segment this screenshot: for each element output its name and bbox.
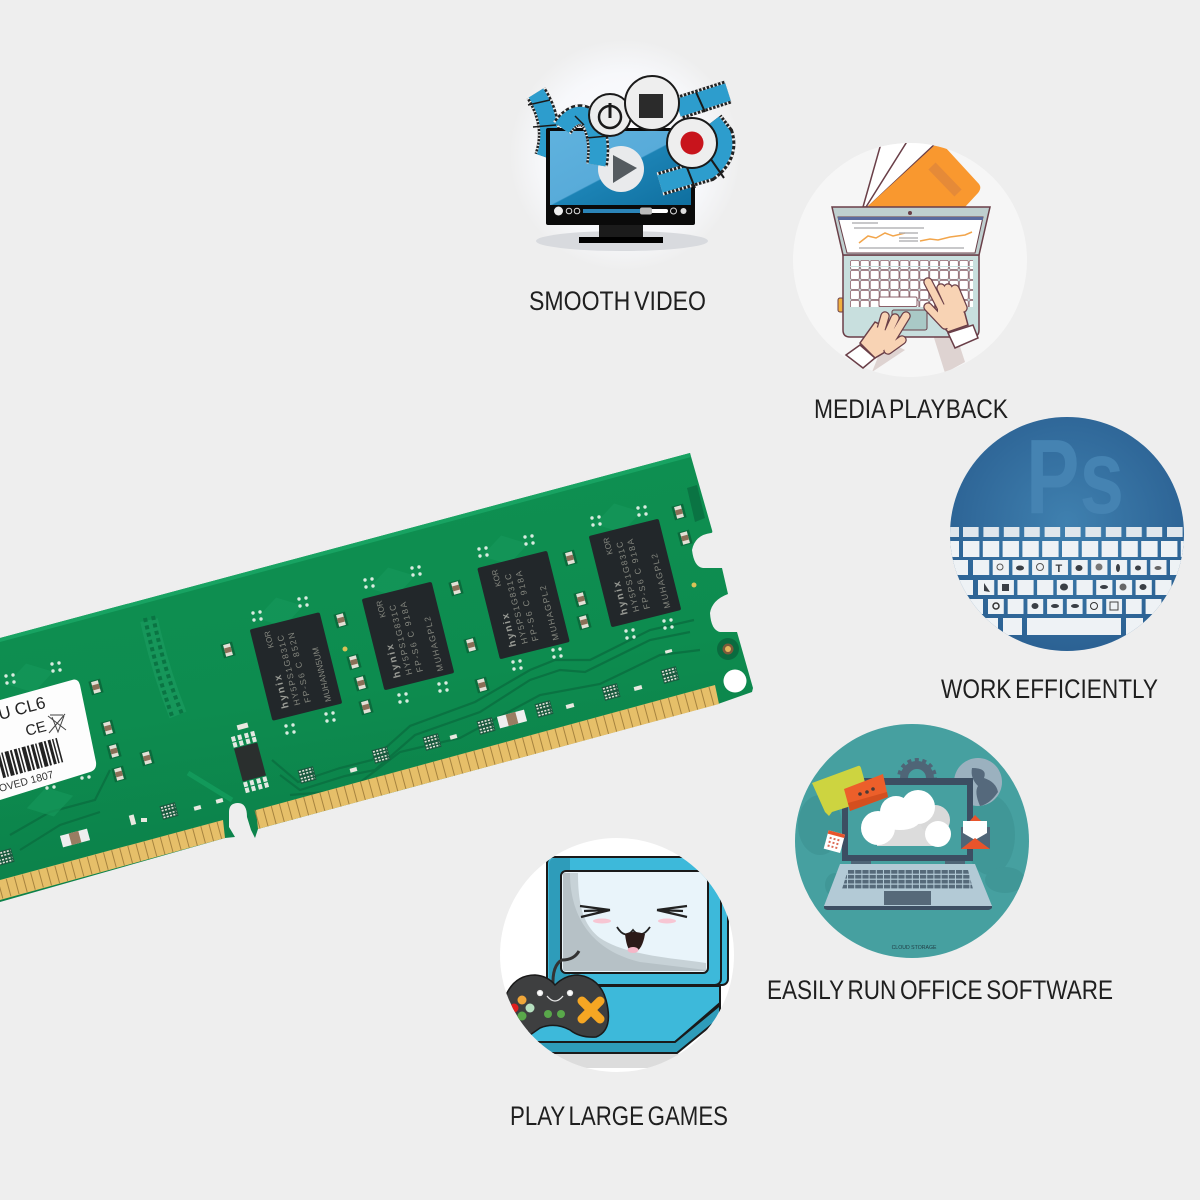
via strip dots: [145, 616, 182, 716]
circuit traces: [10, 620, 700, 850]
stop button: [625, 76, 679, 130]
big capacitor left: [60, 829, 90, 847]
glow backdrop: [509, 39, 741, 271]
tongue: [628, 947, 638, 953]
gold pad: [717, 638, 739, 660]
memory chip 4: MUHAGPL2: [649, 552, 672, 609]
label: play large games: PLAY LARGE GAMES: [510, 1101, 728, 1131]
console base: [525, 986, 720, 1053]
circle background: [795, 724, 1029, 958]
laptop deck: [843, 255, 979, 337]
memory chip 3: HY5PS1G831C: [503, 573, 530, 645]
keyboard keys: [850, 260, 973, 307]
resistor arrays: [0, 666, 680, 866]
memory chip 2: KOR: [375, 599, 388, 619]
memory chip 2: hynix: [385, 643, 404, 679]
console rear: [706, 879, 729, 986]
big capacitor: [497, 710, 527, 728]
circle background: [500, 838, 734, 1072]
world map: [798, 795, 1025, 897]
keyboard rows: [945, 527, 1188, 635]
player controls: [554, 206, 686, 216]
memory chip 2: HY5PS1G831C: [387, 604, 414, 676]
gold contacts right: [256, 685, 719, 829]
label: office software: EASILY RUN OFFICE SOFTWARE: [767, 975, 1113, 1005]
paper sheets: [863, 140, 936, 207]
face: [580, 906, 687, 934]
memory chip 1: hynix: [273, 673, 292, 709]
mouth: [625, 932, 645, 952]
trackpad: [892, 310, 927, 330]
memory chip 4: KOR: [602, 536, 615, 556]
label: work efficiently: WORK EFFICIENTLY: [941, 674, 1158, 704]
memory chip 1: FP-S6 C 852N: [286, 632, 313, 704]
icon: media playback: [831, 143, 991, 372]
Ps watermark: Ps: [1026, 418, 1124, 536]
blush left: [593, 918, 611, 924]
icon: cloud laptop: [795, 724, 1029, 958]
orange folder: [867, 144, 980, 207]
orange speech bubble: [844, 774, 888, 811]
gold contacts left: [0, 820, 225, 900]
screen: [561, 871, 708, 973]
cloud storage caption: CLOUD STORAGE: [892, 945, 937, 951]
label: smooth video: SMOOTH VIDEO: [529, 286, 706, 316]
controller face: [538, 990, 572, 1001]
cable: [553, 951, 579, 987]
keyboard: [842, 870, 973, 889]
memory chip 3: KOR: [490, 568, 503, 588]
memory chip 2: MUHAGPL2: [422, 615, 445, 672]
screen chart: [852, 223, 972, 248]
globe: [954, 758, 1002, 806]
power button: [589, 94, 631, 136]
buttons: [510, 996, 565, 1020]
memory chip 4: [589, 519, 681, 627]
tool glyphs: T: [1056, 563, 1062, 575]
memory chip 4: HY5PS1G831C: [614, 541, 641, 613]
monitor stand: [579, 224, 663, 243]
console body: [547, 857, 721, 985]
circle background: [950, 417, 1184, 651]
memory chip 3: [477, 551, 570, 659]
envelope: [961, 815, 990, 849]
memory chip 3: hynix: [500, 612, 519, 648]
game controller: [506, 951, 608, 1037]
PCB board: [0, 453, 753, 902]
laptop base: [824, 864, 992, 910]
memory chip 3: FP-S6 C 918A: [513, 570, 540, 642]
label: media playback: MEDIA PLAYBACK: [814, 394, 1008, 424]
gold test points: [342, 582, 696, 652]
icon: smooth video: [509, 39, 741, 271]
film strip right lower: [660, 122, 724, 188]
yellow speech bubble: [812, 766, 870, 816]
left hand: [846, 316, 906, 368]
controller body: [506, 975, 608, 1037]
right hand: [928, 282, 978, 348]
trackpad: [884, 891, 931, 905]
small capacitors: [88, 504, 693, 782]
mounting hole: [724, 670, 746, 692]
monitor: [546, 128, 695, 225]
play button: [598, 146, 644, 192]
film strip right upper: [678, 92, 728, 112]
memory chip 4: FP-S6 C 918A: [625, 538, 652, 610]
monitor shadow: [536, 231, 708, 251]
circle backdrop: [793, 143, 1027, 377]
RAM module: [0, 453, 753, 902]
SPD chip: [231, 731, 269, 793]
blush right: [658, 918, 676, 924]
floor shadow: [555, 1054, 679, 1068]
memory chip 2: [362, 582, 454, 690]
memory chip 3: MUHAGPL2: [538, 584, 561, 641]
memory chip 1: [250, 612, 342, 721]
record button: [667, 118, 717, 168]
memory chip 2: FP-S6 C 918A: [398, 601, 425, 673]
dotted via strip: [149, 620, 178, 715]
cloud: [861, 790, 951, 847]
product label: [0, 680, 96, 800]
icon: play games: [500, 838, 734, 1072]
gear: [899, 760, 935, 796]
memory chip 4: hynix: [612, 580, 631, 616]
diagonal trace: [188, 773, 232, 800]
laptop lid: [832, 207, 990, 255]
hand shadows: [872, 338, 965, 372]
tool glyphs: [984, 563, 1162, 610]
side tab: [838, 298, 844, 312]
product label: CE: [24, 718, 48, 740]
orange cross: [582, 1001, 600, 1019]
memory chip 1: HY5PS1G831C: [275, 634, 302, 707]
via diamonds: [3, 497, 645, 823]
small parts: [129, 649, 672, 825]
memory chip 1: KOR: [263, 630, 276, 649]
memory chip 1: MUHANN5UM: [310, 646, 333, 703]
via dots: [4, 505, 674, 790]
notch slot mark: [687, 485, 705, 522]
top edge highlight: [0, 453, 691, 642]
calendar: [824, 830, 845, 853]
laptop screen: [842, 778, 973, 864]
icon: photoshop keyboard: [945, 417, 1188, 651]
film strip behind left: [528, 93, 556, 157]
film strip over monitor: [562, 115, 608, 165]
